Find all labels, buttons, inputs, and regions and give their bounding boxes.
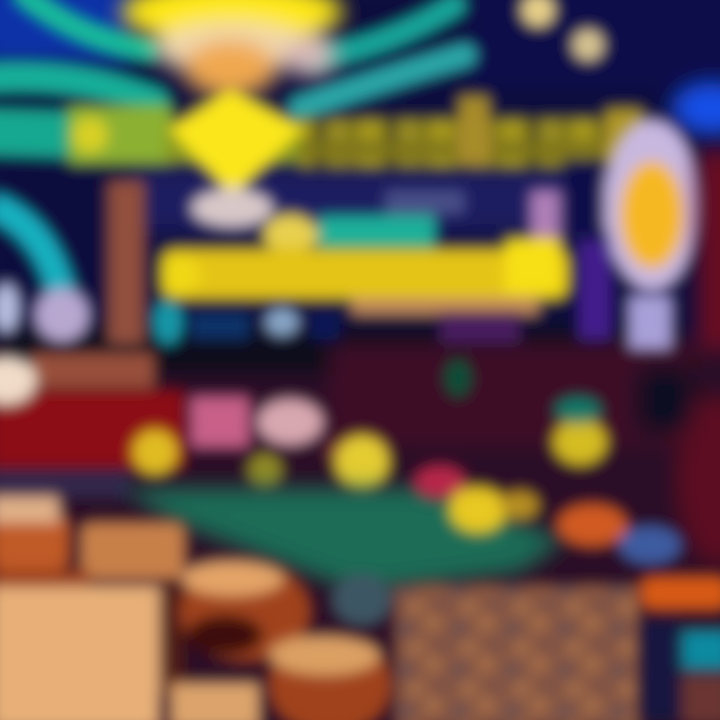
- left lavender blobs: [0, 282, 184, 346]
- yellow banner: [160, 238, 570, 316]
- tan block: [0, 585, 184, 720]
- yellow dots: [131, 358, 608, 490]
- bottom right pieces: [640, 576, 720, 720]
- green panel: [120, 488, 565, 592]
- right flame: [530, 119, 700, 350]
- colourful markers: [414, 465, 682, 565]
- banner lower strip: [190, 307, 520, 343]
- left red band: [0, 352, 185, 498]
- bottom rounded tubs: [170, 560, 392, 720]
- pink blobs: [190, 396, 385, 460]
- right dark red edge: [640, 150, 720, 565]
- top glow: [122, 0, 342, 96]
- brown column: [107, 180, 145, 345]
- orange cups: [0, 495, 185, 588]
- top teal arcs: [0, 0, 465, 135]
- bottom textured field: [332, 574, 640, 720]
- left teal arc: [0, 205, 62, 295]
- headline band: [68, 95, 645, 168]
- stars: [520, 0, 605, 62]
- top right blue corner: [672, 82, 720, 134]
- middle teal band: [262, 190, 465, 257]
- yellow diamond: [168, 88, 305, 228]
